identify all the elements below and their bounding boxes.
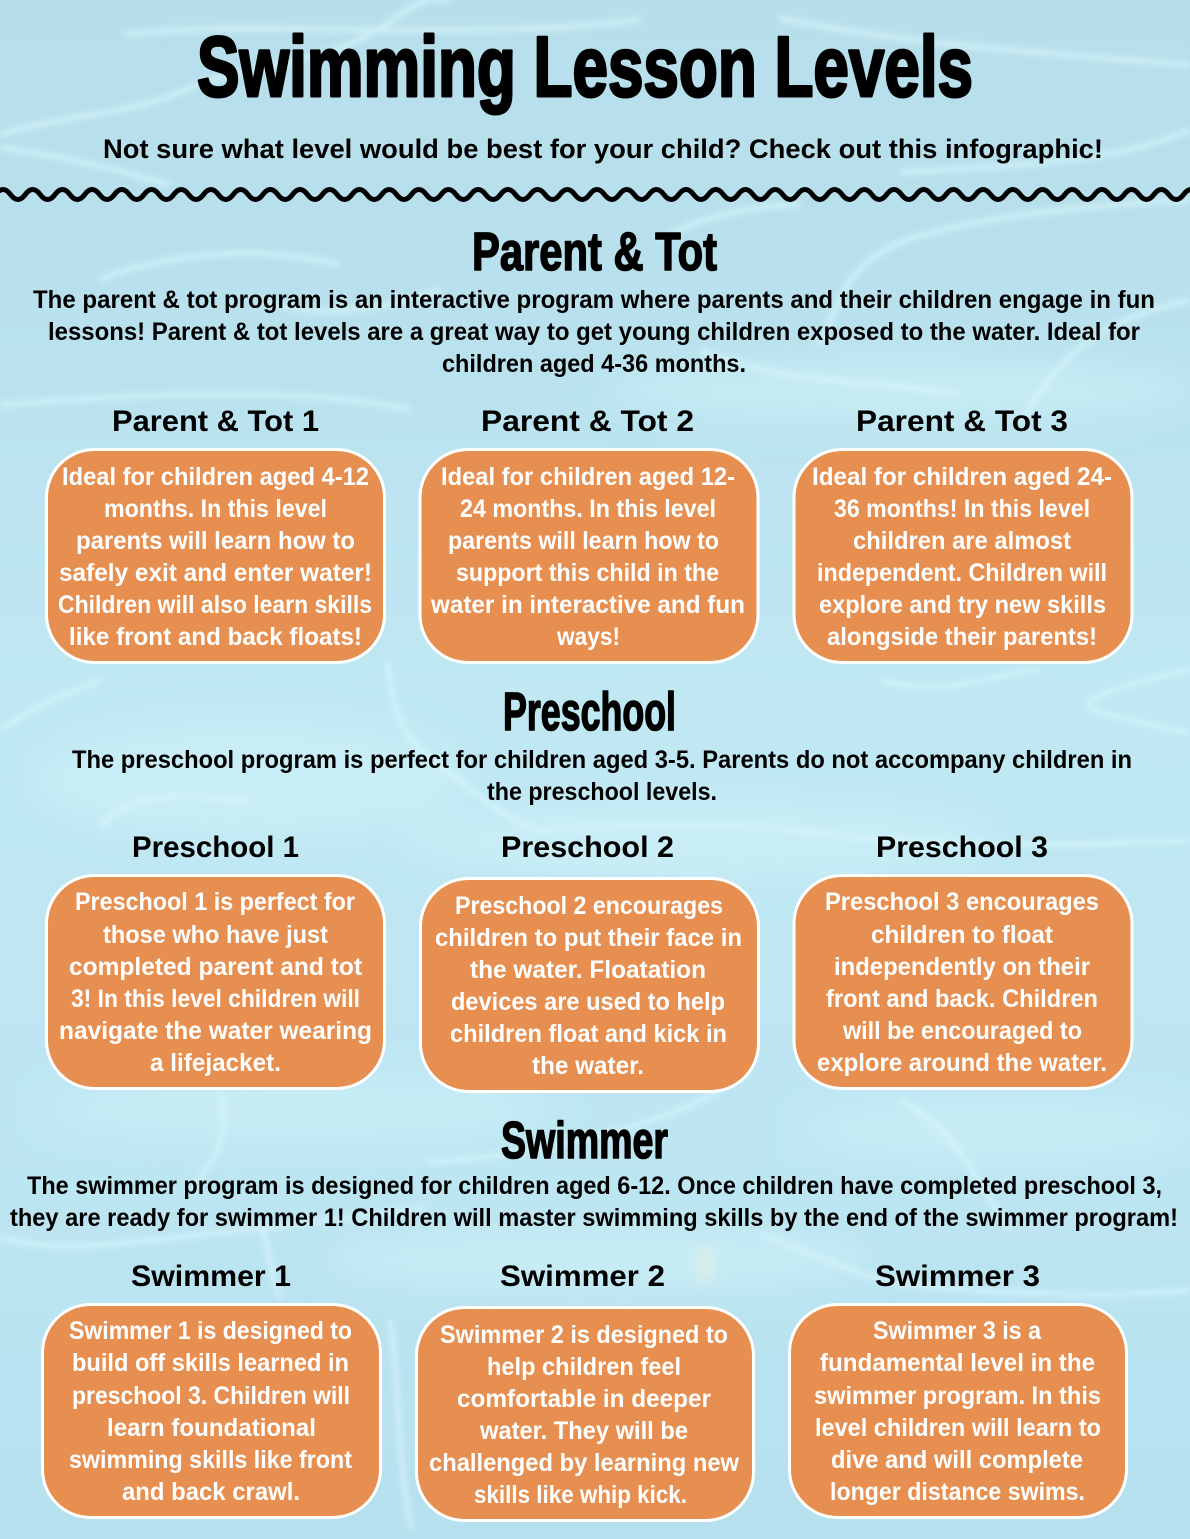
panel: Parent & Tot 3: independent. Children will	[817, 559, 1107, 587]
panel: Parent & Tot 2: parents will learn how to	[448, 527, 719, 555]
panel: Parent & Tot 1: parents will learn how to	[76, 527, 355, 555]
panel: Parent & Tot 1: like front and back floats!	[69, 623, 362, 651]
panel: Preschool 2: the water. Floatation	[470, 956, 706, 984]
panel: Swimmer 1	[42, 1260, 380, 1518]
panel: Swimmer 2: water. They will be	[479, 1417, 688, 1445]
panel: Preschool 2: children to put their face in	[435, 924, 742, 952]
panel: Swimmer 2: Swimmer 2	[500, 1260, 665, 1293]
intro text: Parent & Tot	[33, 286, 1155, 378]
panel: Swimmer 1: swimming skills like front	[69, 1446, 353, 1474]
panel: Parent & Tot 1: Children will also learn skills	[58, 591, 372, 619]
intro text: Swimmer	[10, 1172, 1178, 1232]
panel: Parent & Tot 2: 24 months. In this level	[460, 495, 716, 523]
intro text: Preschool: The preschool program is perfect for children aged 3-5. Parents do not accompany children in	[72, 746, 1132, 774]
subtitle: Not sure what level would be best for your child? Check out this infographic!	[103, 134, 1103, 164]
panel: Parent & Tot 3: children are almost	[853, 527, 1072, 555]
panel: Preschool 3: will be encouraged to	[842, 1017, 1082, 1045]
wavy divider	[0, 184, 1190, 204]
panel: Parent & Tot 2: water in interactive and fun	[430, 591, 745, 619]
panel: Preschool 2: Preschool 2 encourages	[455, 892, 723, 920]
panel: Swimmer 2: skills like whip kick.	[474, 1481, 687, 1509]
panel: Swimmer 1: preschool 3. Children will	[72, 1382, 350, 1410]
panel: Parent & Tot 3: alongside their parents!	[827, 623, 1097, 651]
panel: Swimmer 2: help children feel	[487, 1353, 681, 1381]
panel: Preschool 1	[46, 831, 384, 1088]
panel: Swimmer 1: Swimmer 1	[131, 1260, 291, 1293]
heading: Swimmer: Swimmer	[501, 1112, 668, 1170]
panel: Preschool 1: a lifejacket.	[150, 1049, 281, 1077]
panel: Swimmer 3: Swimmer 3 is a	[873, 1317, 1042, 1345]
panel: Preschool 3: Preschool 3	[876, 831, 1048, 864]
panel: Parent & Tot 3: explore and try new skills	[819, 591, 1106, 619]
panel: Preschool 2	[420, 831, 758, 1092]
section: Swimmer	[10, 1112, 1178, 1520]
heading: Preschool: Preschool	[503, 682, 676, 742]
panel: Swimmer 3: swimmer program. In this	[814, 1382, 1101, 1410]
heading: Parent & Tot: Parent & Tot	[472, 222, 717, 282]
panel: Swimmer 2: Swimmer 2 is designed to	[440, 1321, 728, 1349]
panel: Swimmer 2: comfortable in deeper	[457, 1385, 711, 1413]
panel: Swimmer 2	[416, 1260, 754, 1520]
panel: Parent & Tot 3: Parent & Tot 3	[856, 405, 1068, 438]
panel: Parent & Tot 3: Ideal for children aged 24-	[812, 463, 1112, 491]
panel: Preschool 1: Preschool 1	[132, 831, 299, 864]
panel: Swimmer 1: build off skills learned in	[72, 1349, 349, 1377]
panel: Preschool 1: Preschool 1 is perfect for	[75, 888, 355, 916]
intro text: Preschool	[72, 746, 1132, 806]
panel: Parent & Tot 1	[46, 405, 384, 662]
panel: Swimmer 3: Swimmer 3	[875, 1260, 1040, 1293]
panel: Parent & Tot 3: 36 months! In this level	[834, 495, 1090, 523]
panel: Preschool 3: front and back. Children	[826, 985, 1098, 1013]
intro text: Preschool: the preschool levels.	[487, 778, 717, 806]
panel: Parent & Tot 2: Parent & Tot 2	[481, 405, 694, 438]
panel: Parent & Tot 2: ways!	[556, 623, 620, 651]
panel: Parent & Tot 2: support this child in the	[456, 559, 719, 587]
panel: Swimmer 1: Swimmer 1 is designed to	[69, 1317, 352, 1345]
panel: Preschool 3: explore around the water.	[817, 1049, 1107, 1077]
panel: Swimmer 1: and back crawl.	[122, 1478, 300, 1506]
panel: Preschool 3: independently on their	[834, 953, 1090, 981]
panel: Preschool 3: Preschool 3 encourages	[825, 888, 1099, 916]
panel: Parent & Tot 1: Parent & Tot 1	[112, 405, 319, 438]
intro text: Parent & Tot: children aged 4-36 months.	[442, 350, 746, 378]
panel: Preschool 1: those who have just	[103, 921, 329, 949]
panel: Parent & Tot 3	[794, 405, 1132, 662]
panel: Preschool 2: children float and kick in	[450, 1020, 727, 1048]
panel: Preschool 1: navigate the water wearing	[59, 1017, 372, 1045]
panel: Swimmer 3: fundamental level in the	[820, 1349, 1095, 1377]
panel: Swimmer 2: challenged by learning new	[429, 1449, 740, 1477]
panel: Preschool 2: devices are used to help	[451, 988, 725, 1016]
panel: Parent & Tot 1: Ideal for children aged 4-12	[62, 463, 369, 491]
panel: Parent & Tot 2: Ideal for children aged 12-	[441, 463, 735, 491]
panel: Swimmer 3	[790, 1260, 1126, 1518]
panel: Preschool 2: the water.	[532, 1052, 644, 1080]
panel: Preschool 1: 3! In this level children will	[71, 985, 360, 1013]
panel: Parent & Tot 2	[420, 405, 758, 662]
panel: Parent & Tot 1: months. In this level	[104, 495, 327, 523]
intro text: Parent & Tot: The parent & tot program is an interactive program where parents and their children engage in fun	[33, 286, 1155, 314]
panel: Preschool 3: children to float	[871, 921, 1054, 949]
panel: Preschool 1: completed parent and tot	[69, 953, 363, 981]
section: Parent & Tot	[33, 222, 1155, 662]
section: Preschool	[46, 682, 1132, 1092]
panel: Swimmer 3: dive and will complete	[831, 1446, 1083, 1474]
panel: Swimmer 1: learn foundational	[107, 1414, 316, 1442]
panel: Swimmer 3: longer distance swims.	[830, 1478, 1085, 1506]
panel: Preschool 2: Preschool 2	[501, 831, 674, 864]
intro text: Parent & Tot: lessons! Parent & tot levels are a great way to get young children exposed to the water. Ideal for	[48, 318, 1140, 346]
panel: Preschool 3	[794, 831, 1132, 1088]
panel: Swimmer 3: level children will learn to	[815, 1414, 1101, 1442]
panel: Parent & Tot 1: safely exit and enter water!	[59, 559, 372, 587]
